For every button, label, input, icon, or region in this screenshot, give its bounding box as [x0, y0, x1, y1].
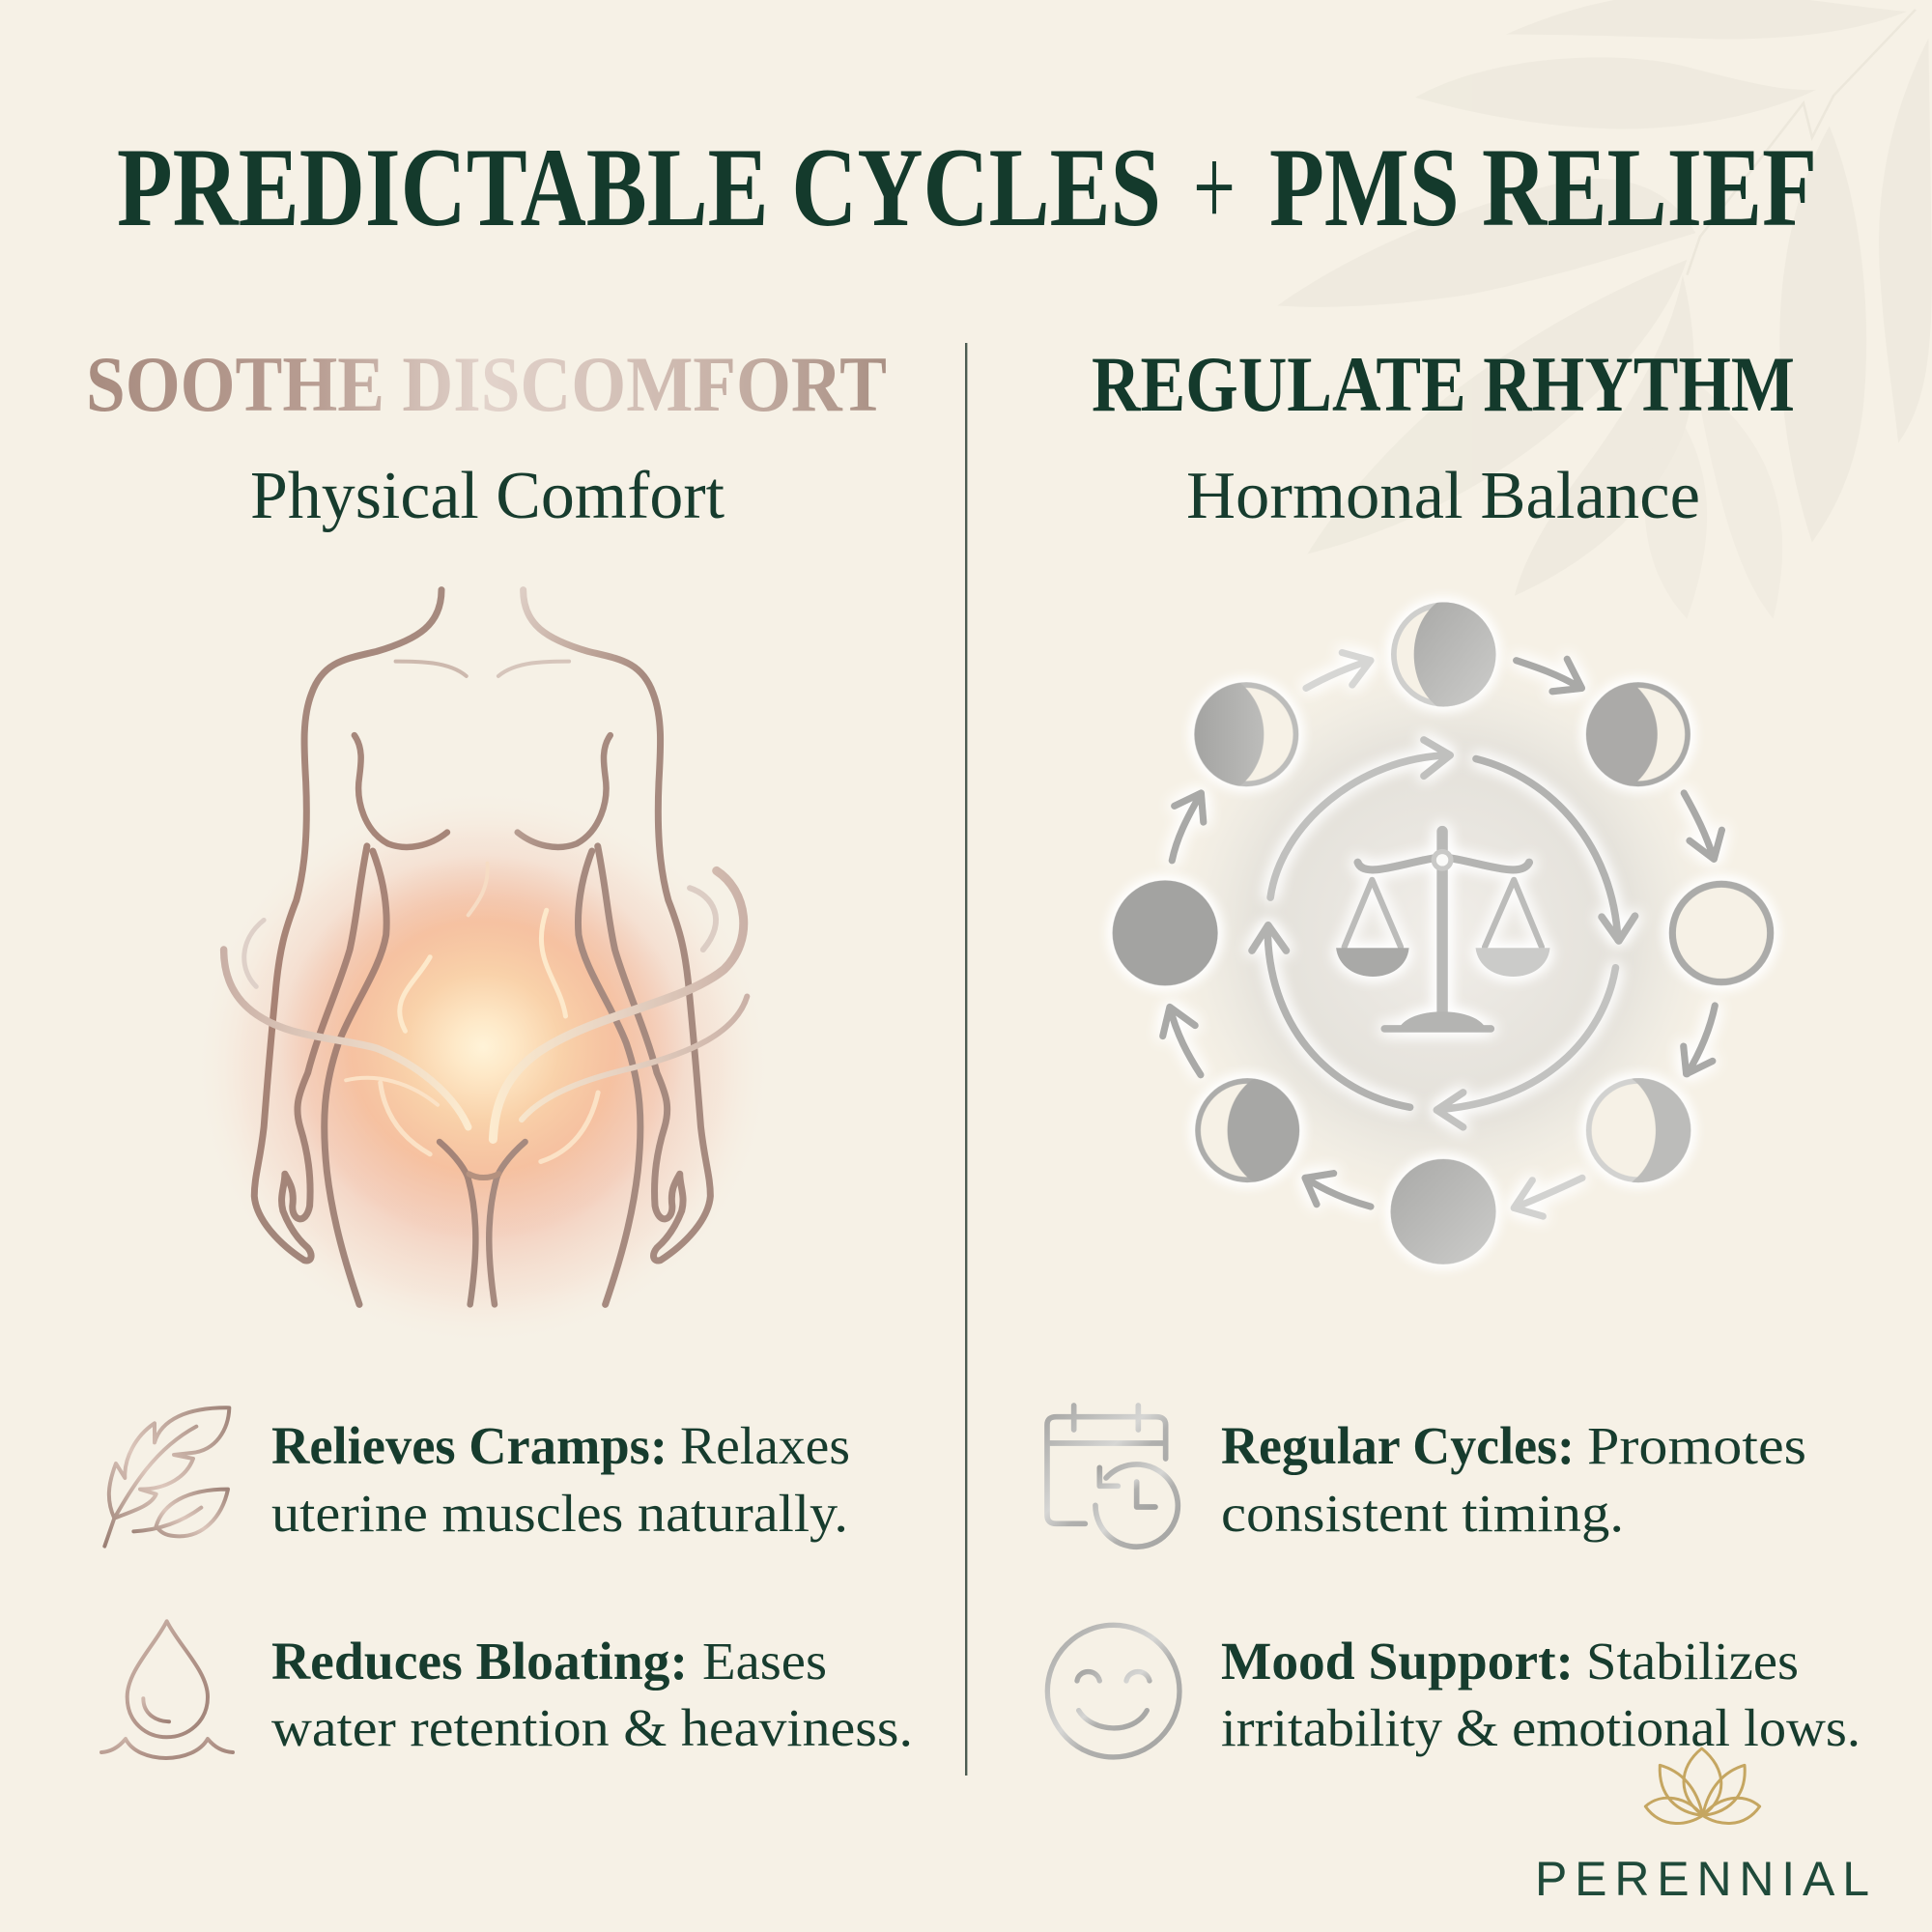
- moon: bottom left: [1198, 1079, 1299, 1182]
- icon: smiley: [1047, 1625, 1179, 1757]
- text: reduces bloating: Reduces Bloating:: [271, 1632, 688, 1690]
- inner cycle arrows: [1252, 740, 1635, 1127]
- text: regular cycles: [1221, 1416, 1806, 1543]
- title: +: [1193, 126, 1236, 250]
- moon: right: [1672, 884, 1771, 982]
- heading: soothe discomfort: SOOTHE DISCOMFORT: [86, 340, 887, 428]
- abdominal glow: [193, 787, 773, 1348]
- swirl lines: [224, 864, 747, 1161]
- text: mood support: Stabilizes: [1586, 1632, 1799, 1690]
- decorative botanical leaves: [1277, 0, 1932, 619]
- divider: [965, 343, 967, 1776]
- balance scale: [1336, 832, 1550, 1029]
- title: PREDICTABLE CYCLES: [117, 126, 1161, 250]
- moon cycle diagram: [1113, 602, 1771, 1264]
- text: relieves cramps: uterine muscles naturally.: [271, 1484, 848, 1543]
- subheading: physical comfort: Physical Comfort: [250, 459, 725, 533]
- text: relieves cramps: Relaxes: [680, 1416, 850, 1475]
- text: relieves cramps: Relieves Cramps:: [271, 1416, 668, 1475]
- moon: bottom: [1391, 1159, 1496, 1264]
- icon: lotus: [1645, 1748, 1760, 1824]
- text: relieves cramps: [271, 1416, 850, 1543]
- center halo: [1148, 638, 1739, 1229]
- text: regular cycles: Regular Cycles:: [1221, 1416, 1575, 1475]
- text: reduces bloating: Eases: [702, 1632, 827, 1690]
- wordmark: PERENNIAL: [1535, 1852, 1869, 1906]
- panel: soothe discomfort: [86, 340, 913, 1758]
- icon: calendar with clock: [1047, 1406, 1178, 1547]
- heading: regulate rhythm: REGULATE RHYTHM: [1092, 340, 1795, 428]
- crotch line: [469, 1174, 498, 1178]
- text: mood support: Mood Support:: [1221, 1632, 1574, 1690]
- text: regular cycles: consistent timing.: [1221, 1484, 1624, 1543]
- body illustration: [224, 590, 747, 1304]
- moon: left: [1113, 880, 1218, 985]
- body outline: left side: [254, 590, 475, 1304]
- text: reduces bloating: [271, 1632, 913, 1757]
- benefit: regular cycles: [1047, 1406, 1806, 1547]
- benefit: mood support: [1047, 1625, 1861, 1757]
- moon phases: [1113, 602, 1771, 1264]
- moon: top: [1394, 602, 1496, 707]
- text: mood support: irritability & emotional lows.: [1221, 1698, 1861, 1757]
- text: reduces bloating: water retention & heaviness.: [271, 1698, 913, 1757]
- subheading: hormonal balance: Hormonal Balance: [1186, 459, 1700, 533]
- logo: perennial: [1535, 1748, 1869, 1906]
- body outline: right side: [489, 590, 710, 1304]
- icon: feather: [104, 1407, 229, 1547]
- moon: top right: [1586, 683, 1688, 786]
- text: regular cycles: Promotes: [1587, 1416, 1806, 1475]
- moon: bottom right: [1589, 1078, 1690, 1182]
- moon: top left: [1195, 683, 1295, 786]
- icon: water drop: [101, 1621, 233, 1758]
- benefit: reduces bloating: [101, 1621, 913, 1758]
- text: mood support: [1221, 1632, 1861, 1757]
- benefit: relieves cramps: [104, 1407, 850, 1547]
- outer cycle arrows: [1163, 653, 1721, 1216]
- panel: regulate rhythm: [1047, 340, 1861, 1757]
